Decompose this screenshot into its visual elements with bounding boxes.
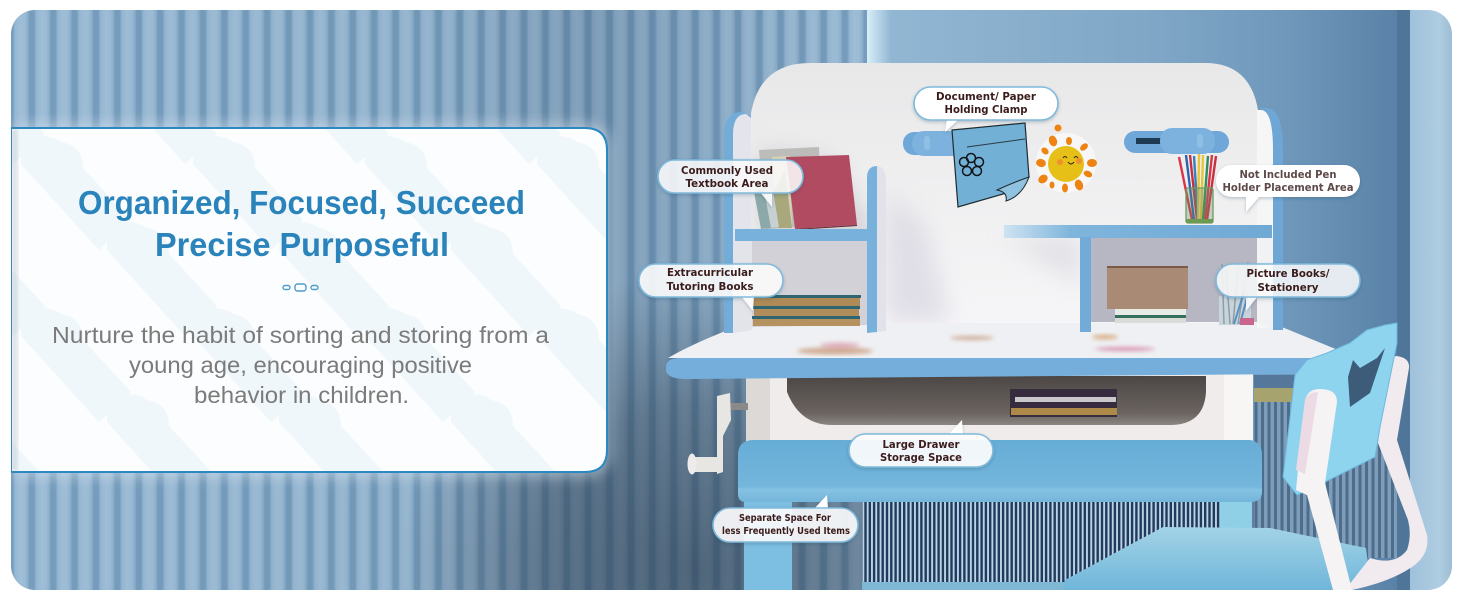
- info panel: [4, 122, 612, 478]
- right side panel: [1257, 108, 1283, 330]
- right leg: [1220, 502, 1252, 528]
- brown picture book: [1107, 266, 1188, 323]
- left frame bar: [1296, 389, 1352, 590]
- callout: drawer storage: Large Drawer: [882, 439, 960, 451]
- left leg: [744, 500, 792, 590]
- callout: picture books: Stationery: [1258, 282, 1319, 294]
- board shadows: [886, 190, 1080, 322]
- left bay: [733, 150, 880, 333]
- callout: pen holder: Holder Placement Area: [1222, 182, 1354, 194]
- callout: tutoring books: [639, 264, 783, 311]
- callout: document clamp: [914, 87, 1058, 132]
- right shelf support: [1080, 237, 1091, 332]
- chair: [1063, 323, 1427, 590]
- callout: textbook area: Commonly Used: [681, 165, 773, 177]
- body text: young age, encouraging positive: [129, 352, 472, 378]
- callout: drawer storage: [849, 420, 993, 467]
- body text: [52, 322, 549, 408]
- callout: textbook area: [658, 160, 803, 207]
- callout: document clamp: Document/ Paper: [936, 91, 1037, 103]
- desk: lower structure: [688, 374, 1397, 590]
- pencil holder: [1179, 154, 1216, 223]
- books: commonly used textbooks: [754, 147, 857, 230]
- background: ribbed wall: [11, 10, 920, 590]
- backrest: [1283, 323, 1397, 495]
- stationery cup: [1219, 262, 1254, 325]
- desk stickers: [797, 334, 1155, 354]
- callout: separate space: Separate Space For: [739, 513, 831, 524]
- right bay: [1091, 238, 1257, 322]
- back board: [751, 63, 1258, 328]
- paper note: [952, 123, 1029, 207]
- callout: pen holder: [1216, 165, 1360, 212]
- body text: Nurture the habit of sorting and storing from a: [52, 322, 549, 348]
- callout: document clamp: Holding Clamp: [944, 104, 1028, 116]
- seat: [1063, 527, 1368, 590]
- ornament: three pills: [283, 284, 318, 291]
- divider: [867, 166, 886, 333]
- body text: behavior in children.: [194, 382, 409, 408]
- clamp right: [1124, 128, 1229, 154]
- left side panel: [724, 112, 751, 333]
- heading: Precise Purposeful: [155, 226, 449, 263]
- callout: separate space: [713, 495, 858, 542]
- callout: separate space: less Frequently Used Items: [722, 526, 850, 537]
- sun sticker: [1035, 124, 1097, 193]
- callout: picture books: Picture Books/: [1246, 268, 1330, 280]
- blue storage tray: [738, 440, 1262, 502]
- drawer books: [1010, 389, 1117, 417]
- callout: tutoring books: Extracurricular: [667, 267, 754, 279]
- heading: [78, 184, 525, 263]
- callout: textbook area: Textbook Area: [686, 178, 768, 190]
- background: plain wall: [867, 10, 1452, 590]
- height crank: [688, 393, 748, 474]
- clamp left: [903, 131, 954, 156]
- flower doodle: [960, 154, 984, 176]
- heading: Organized, Focused, Succeed: [78, 184, 525, 221]
- upper right shelf: [1004, 225, 1272, 238]
- fine striped backdrop: [862, 500, 1222, 582]
- desk hutch: [724, 108, 1283, 333]
- shelf left: [735, 229, 869, 241]
- callout: pen holder: Not Included Pen: [1240, 169, 1336, 181]
- right frame bar: [1345, 356, 1427, 590]
- desktop: [666, 323, 1338, 379]
- books: extracurricular stack: [752, 295, 861, 326]
- callout: tutoring books: Tutoring Books: [666, 281, 754, 293]
- callout: picture books: [1216, 264, 1360, 311]
- panel glow: [4, 122, 612, 478]
- callout: drawer storage: Storage Space: [880, 452, 962, 464]
- drawer: [746, 374, 1253, 444]
